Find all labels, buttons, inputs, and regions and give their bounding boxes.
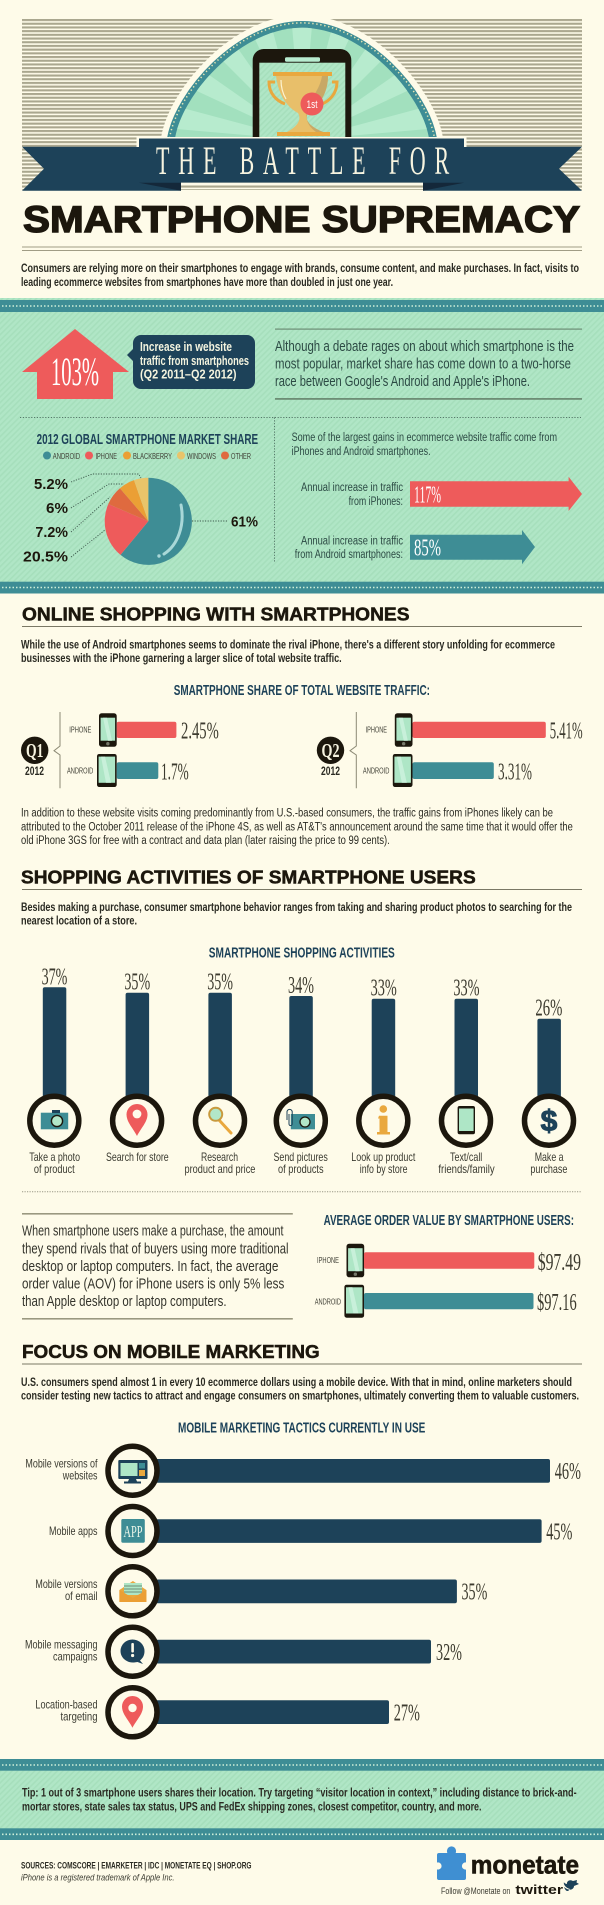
sources: iPhone is a registered trademark of Apple Inc.: [21, 1872, 174, 1882]
chart: Q1 traffic: [21, 712, 219, 788]
text block: largest gains: [292, 432, 557, 458]
text block: order value: desktop or laptop computers. In fact, the average: [22, 1259, 278, 1275]
section: mobile marketing: [21, 1342, 582, 1737]
activity: text/call: Text/call: [450, 1150, 482, 1164]
tactic: location targeting: Location-based: [35, 1698, 98, 1712]
activity: look up product: info by store: [360, 1162, 408, 1176]
tactic: mobile email: of email: [65, 1589, 98, 1603]
text block: businesses with the iPhone garnering a larger slice of total website traffic.: [21, 653, 342, 665]
activity: make a purchase: $: [541, 1105, 558, 1138]
activity: look up product: [351, 975, 416, 1176]
chart: average order value: [315, 1213, 581, 1318]
legend: IPHONE: [96, 451, 117, 461]
activity: send pictures: Send pictures: [274, 1150, 328, 1164]
panel: traffic and market share: [0, 298, 604, 594]
heading: global market share: 2012 GLOBAL SMARTPHONE MARKET SHARE: [37, 432, 258, 448]
activity: research: Research: [201, 1150, 238, 1164]
tactic: mobile email: Mobile versions: [35, 1577, 98, 1591]
logo: monetate: twitter: [515, 1882, 563, 1897]
legend: OTHER: [231, 451, 251, 461]
chart: average order value: IPHONE: [317, 1255, 339, 1265]
chart: Q2 traffic: Q2: [322, 740, 340, 762]
arrow chart: Android 85%: from Android smartphones:: [295, 549, 403, 561]
text block: order value: When smartphone users make a purchase, the amount: [22, 1224, 284, 1240]
logo: monetate: [434, 1846, 579, 1897]
chart: average order value: $97.49: [538, 1250, 581, 1276]
sources: SOURCES: COMSCORE | EMARKETER | IDC | MONETATE EQ | SHOP.ORG: [21, 1861, 252, 1871]
activity: look up product: Look up product: [351, 1150, 416, 1164]
activity: text/call: friends/family: [438, 1162, 495, 1176]
panel: tip: [0, 1759, 604, 1840]
activity: search for store: [106, 970, 169, 1164]
tactic: mobile email: [35, 1567, 487, 1616]
arch with sunburst: [161, 19, 443, 137]
arrow chart: Android 85%: Annual increase in traffic: [301, 535, 403, 547]
heading: FOCUS ON MOBILE MARKETING: [22, 1342, 320, 1362]
heading: SHOPPING ACTIVITIES OF SMARTPHONE USERS: [21, 867, 476, 887]
pie chart: 20.5%: [23, 549, 68, 566]
tactic: mobile websites: websites: [62, 1468, 98, 1482]
tactic: mobile apps: 45%: [546, 1519, 572, 1545]
arrow chart: iPhone 117%: [301, 477, 582, 511]
tactic: mobile messaging: 32%: [436, 1640, 462, 1666]
activity: search for store: 35%: [124, 970, 150, 996]
tactic: mobile websites: 46%: [555, 1459, 581, 1485]
text block: [21, 1377, 579, 1403]
activity: look up product: 33%: [371, 975, 397, 1001]
logo: monetate: Follow @Monetate on: [441, 1886, 510, 1896]
text block: [21, 808, 573, 847]
text block: old iPhone 3GS for free with a contract and data plan (later raising the price to 99 cents).: [21, 835, 390, 847]
legend: BLACKBERRY: [133, 451, 172, 461]
activity: research: [184, 970, 256, 1176]
tactic: mobile apps: APP: [124, 1522, 142, 1541]
activity: make a purchase: purchase: [530, 1162, 568, 1176]
activity: send pictures: 34%: [288, 973, 314, 999]
tactic: location targeting: targeting: [60, 1710, 98, 1724]
sources: [21, 1861, 252, 1882]
arrow chart: Android 85%: 85%: [414, 536, 441, 562]
pie chart: 7.2%: [35, 524, 68, 541]
chart: Q1 traffic: IPHONE: [69, 725, 92, 735]
chart: Q2 traffic: ANDROID: [363, 765, 389, 775]
chart: Q2 traffic: [317, 712, 583, 788]
title: smartphone supremacy: SMARTPHONE SUPREMACY: [23, 199, 580, 240]
tactic: mobile messaging: [25, 1627, 462, 1676]
text block: [21, 639, 555, 665]
callout: increase in website traffic: Increase in website: [140, 339, 232, 354]
tactic: mobile apps: Mobile apps: [49, 1524, 98, 1538]
logo: monetate: monetate: [471, 1849, 579, 1879]
tactic: mobile messaging: Mobile messaging: [25, 1637, 98, 1651]
chart: average order value: ANDROID: [315, 1296, 341, 1306]
icon: house arrow 103%: 103%: [51, 349, 99, 394]
activity: take a photo: of product: [34, 1162, 75, 1176]
icon: phone with trophy: 1st: [306, 99, 318, 111]
text block: nearest location of a store.: [21, 916, 137, 928]
header illustration: [22, 0, 582, 191]
tactic: mobile apps: [49, 1506, 572, 1556]
callout: increase in website traffic: traffic from smartphones: [140, 353, 249, 368]
chart: Q2 traffic: 3.31%: [498, 759, 532, 785]
chart: Q1 traffic: 2012: [25, 766, 44, 778]
text block: order value: they spend rivals that of buyers using more traditional: [22, 1241, 288, 1257]
text block: order value: than Apple desktop or laptop computers.: [22, 1294, 226, 1310]
arrow chart: iPhone 117%: Annual increase in traffic: [301, 482, 403, 494]
icon: twitter bird: [564, 1880, 579, 1891]
icon: house arrow 103%: [22, 329, 129, 399]
text block: [21, 902, 572, 928]
panel: tip: mortar stores, state sales tax status, UPS and FedEx shipping zones, closest competitor, country, and more.: [22, 1802, 482, 1814]
callout: increase in website traffic: [127, 335, 255, 389]
arrow chart: iPhone 117%: from iPhones:: [349, 496, 403, 508]
section: online shopping: [21, 605, 583, 847]
intro text: [21, 263, 579, 289]
activity: text/call: 33%: [453, 975, 480, 1001]
arrow chart: Android 85%: [295, 530, 535, 564]
activity: send pictures: of products: [278, 1162, 324, 1176]
tactic: location targeting: 27%: [394, 1701, 420, 1727]
text block: two-horse race: [275, 328, 582, 400]
tactic: mobile websites: Mobile versions of: [25, 1456, 98, 1470]
pie chart: 6%: [46, 500, 68, 517]
activity: research: 35%: [207, 970, 233, 996]
pie chart: 5.2%: [34, 476, 68, 493]
intro text: leading ecommerce websites from smartphones have more than doubled in just one year.: [21, 277, 393, 289]
legend: ANDROID: [53, 451, 80, 461]
chart: Q2 traffic: 2012: [321, 766, 340, 778]
title: the battle for: THE BATTLE FOR: [156, 138, 449, 183]
legend: [43, 451, 251, 461]
activity: search for store: Search for store: [106, 1150, 169, 1164]
chart: Q1 traffic: ANDROID: [67, 765, 93, 775]
activity: take a photo: 37%: [42, 964, 67, 990]
tactic: mobile websites: [25, 1446, 581, 1495]
chart title: SMARTPHONE SHOPPING ACTIVITIES: [209, 946, 395, 962]
activity: make a purchase: Make a: [535, 1150, 564, 1164]
activity: take a photo: [29, 964, 80, 1176]
tactic: mobile email: 35%: [462, 1580, 487, 1606]
text block: order value: [22, 1213, 293, 1320]
tactic: mobile messaging: campaigns: [53, 1649, 98, 1663]
activity: send pictures: [274, 973, 328, 1176]
chart: Q1 traffic: 2.45%: [181, 718, 219, 744]
chart: Q1 traffic: 1.7%: [161, 759, 189, 785]
activity: research: product and price: [184, 1162, 256, 1176]
pie chart: 61%: [231, 514, 258, 531]
chart title: SMARTPHONE SHARE OF TOTAL WEBSITE TRAFFIC:: [174, 683, 430, 699]
ribbon banner: [22, 137, 582, 191]
pie chart: [23, 474, 258, 566]
callout: increase in website traffic: (Q2 2011–Q2 2012): [140, 366, 236, 382]
activity: make a purchase: 26%: [535, 996, 562, 1022]
heading: ONLINE SHOPPING WITH SMARTPHONES: [22, 605, 410, 625]
legend: WINDOWS: [187, 451, 216, 461]
arrow chart: iPhone 117%: 117%: [414, 482, 441, 508]
activity: text/call: [438, 975, 495, 1176]
tactic: location targeting: [35, 1688, 420, 1737]
section: shopping activities: [21, 867, 582, 1320]
chart: Q1 traffic: Q1: [26, 740, 43, 762]
activity: take a photo: Take a photo: [29, 1150, 80, 1164]
text block: order value: order value (AOV) for iPhone users is only 5% less: [22, 1276, 284, 1292]
icon: phone with trophy: [253, 49, 351, 141]
text block: largest gains: iPhones and Android smartphones.: [292, 446, 431, 458]
chart title: MOBILE MARKETING TACTICS CURRENTLY IN USE: [178, 1420, 426, 1436]
activity: make a purchase: [524, 996, 574, 1176]
icon: puzzle piece: [434, 1846, 469, 1880]
chart: average order value: $97.16: [537, 1290, 577, 1316]
chart: Q2 traffic: IPHONE: [366, 725, 387, 735]
